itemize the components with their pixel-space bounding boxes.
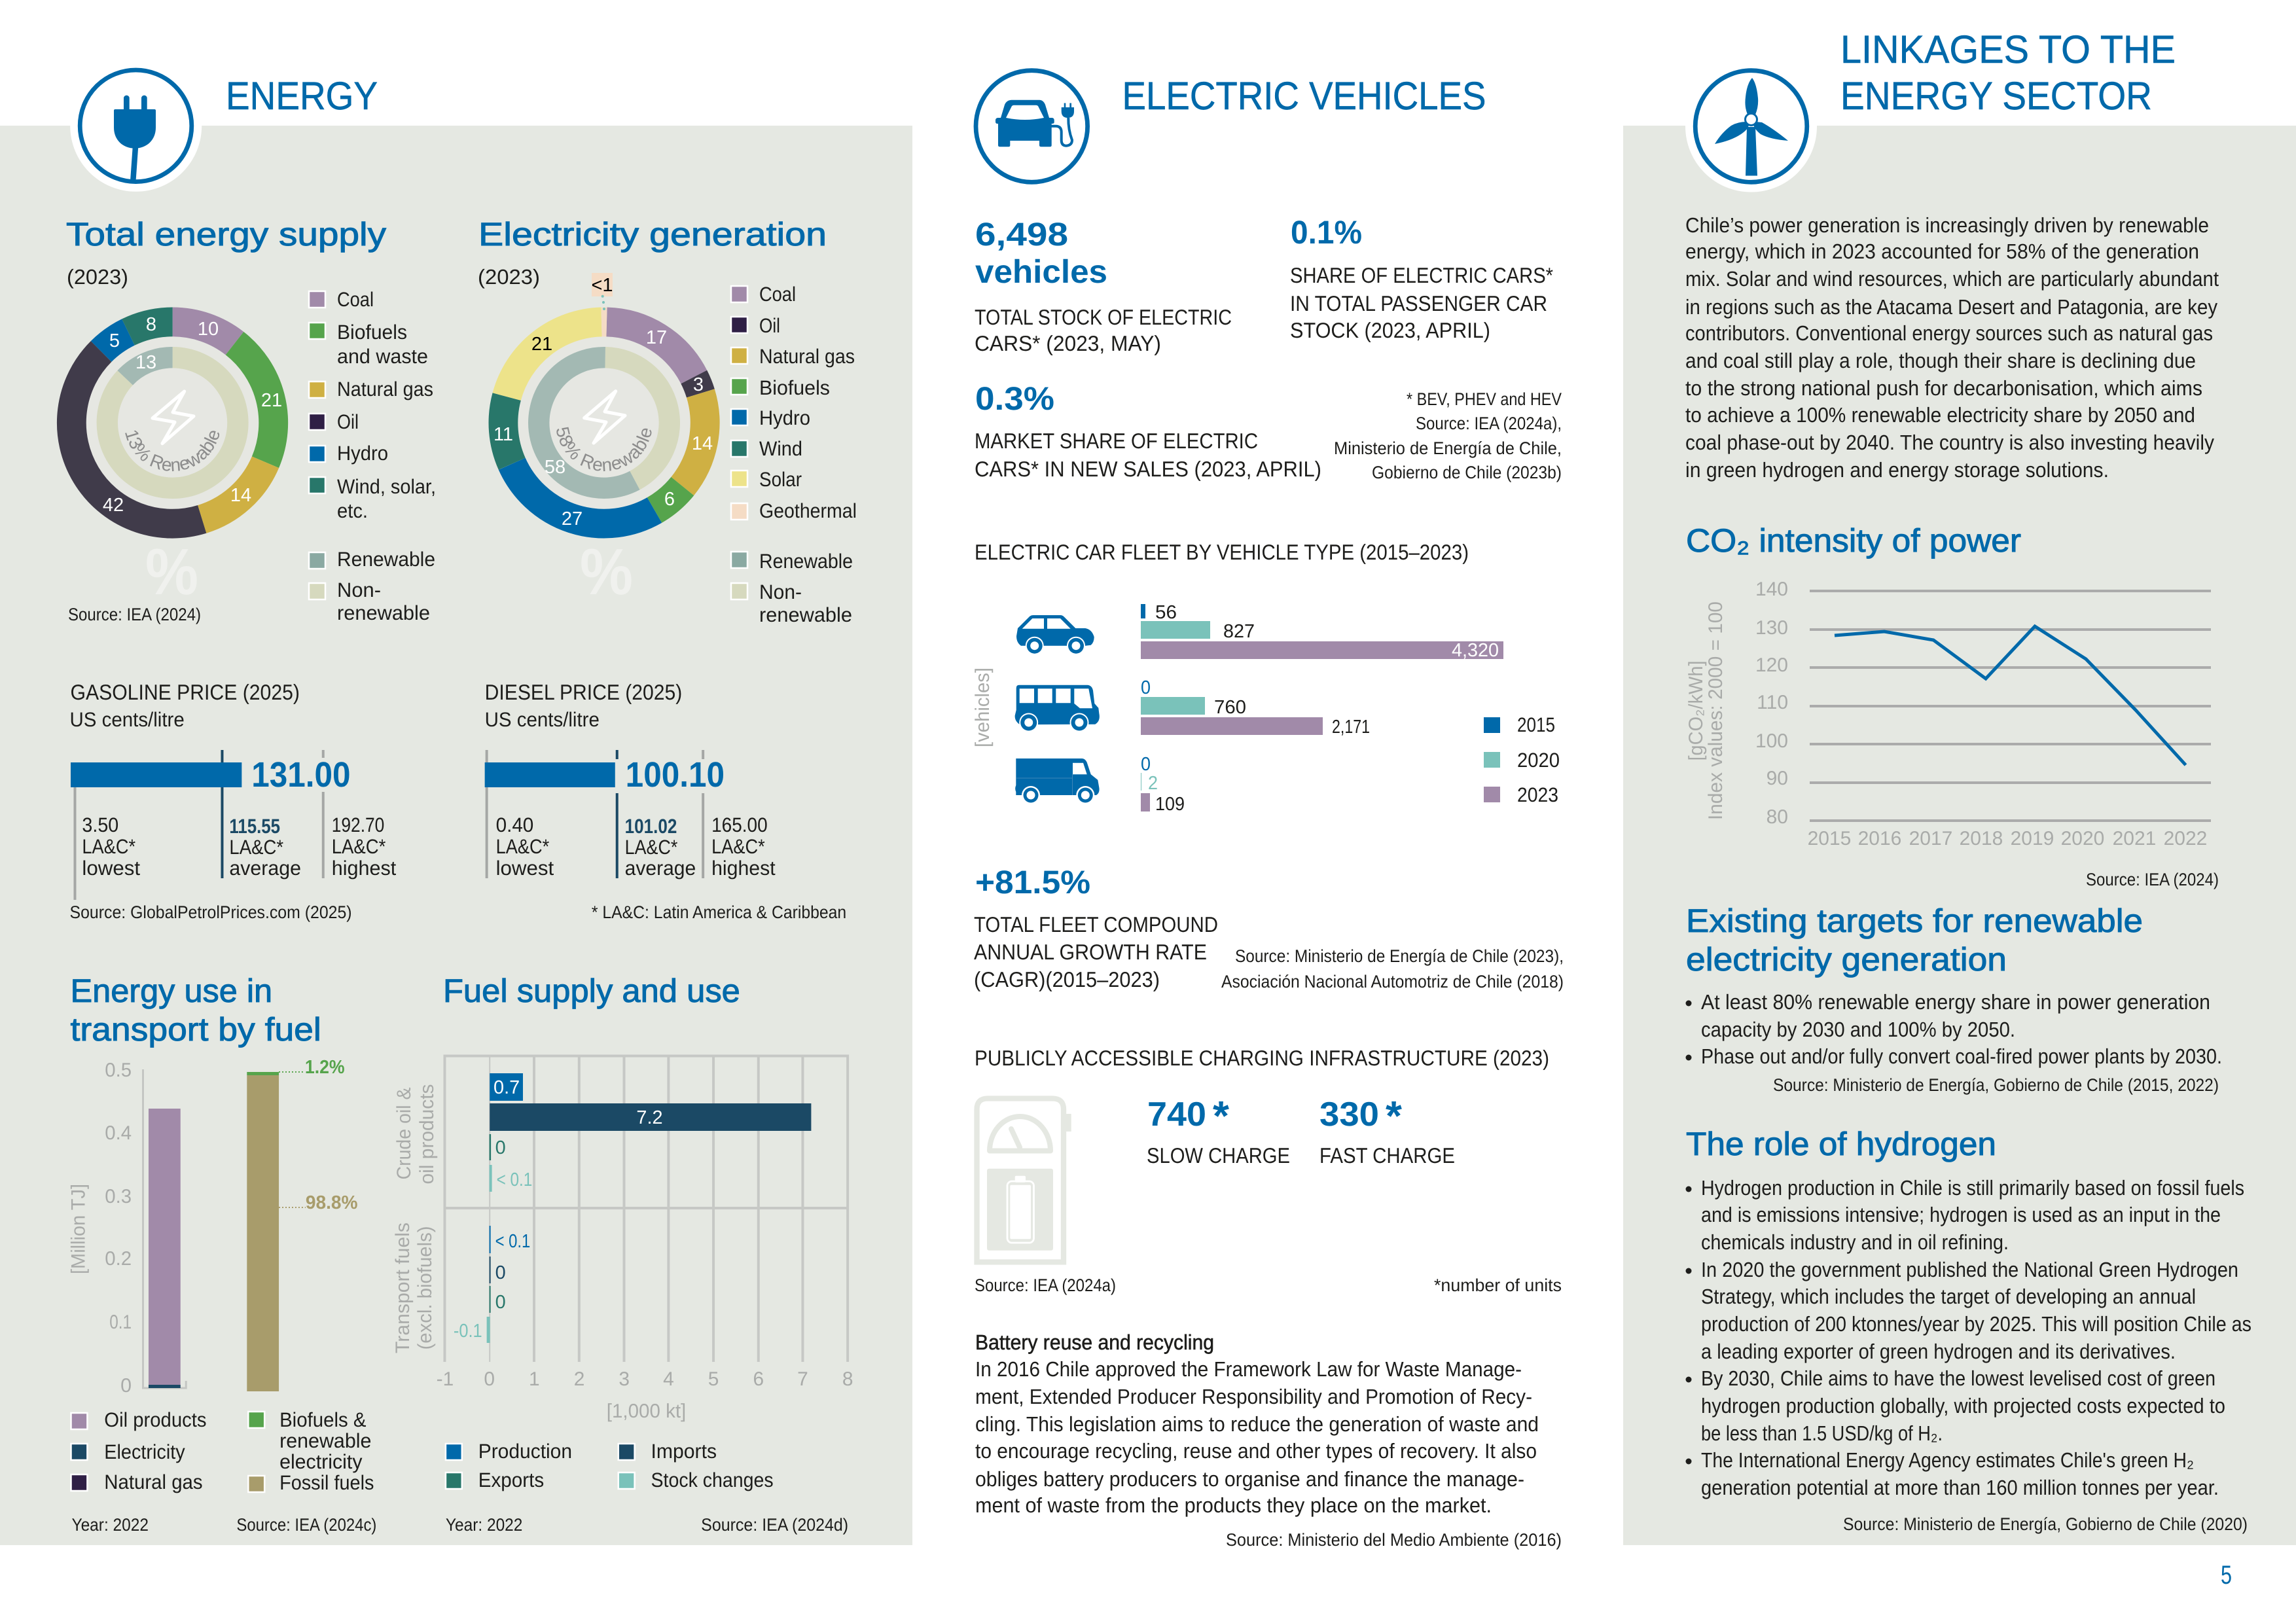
source note: EV statistics: Gobierno de Chile (2023b) — [1372, 463, 1562, 482]
stat: slow charge: SLOW CHARGE — [1147, 1143, 1290, 1168]
gasoline price block: lowest — [82, 857, 140, 880]
lower energy content: prices and charts — [68, 680, 853, 1535]
line chart: CO2 intensity: 2015 — [1808, 828, 1851, 849]
heading: charging infrastructure: PUBLICLY ACCESSIBLE CHARGING INFRASTRUCTURE (2023) — [975, 1046, 1549, 1070]
heading: existing targets — [1686, 902, 2143, 978]
icon: bus — [1015, 685, 1100, 732]
text block: intro: in regions such as the Atacama Desert and Patagonia, are key — [1685, 295, 2217, 319]
icon: wind turbine — [1685, 60, 1817, 192]
bar: gasoline price — [71, 762, 242, 787]
stat: market share in new sales: CARS* IN NEW SALES (2023, APRIL) — [975, 457, 1321, 481]
diesel price block: average — [625, 857, 696, 880]
bar chart: energy use in transport: 0.2 — [105, 1248, 132, 1270]
bar chart: fuel supply and use: Transport fuels — [392, 1222, 414, 1353]
page number: 5 — [2221, 1561, 2232, 1590]
bar chart: fuel supply and use: 5 — [708, 1368, 719, 1390]
legend: fuel supply and use: Production — [478, 1440, 572, 1463]
year label: electricity generation: (2023) — [478, 265, 540, 289]
bullet list: role of hydrogen: Strategy, which includes the target of developing an annual — [1701, 1285, 2196, 1308]
bar: transport exports 0: 0 — [495, 1292, 506, 1313]
percent watermark: electricity generation: % — [580, 535, 633, 609]
heading: linkages to the energy sector: ENERGY SECTOR — [1840, 74, 2152, 118]
donut chart: electricity generation: 58% Renewable — [556, 427, 652, 471]
bullet list: role of hydrogen: By 2030, Chile aims to have the lowest levelised cost of green — [1701, 1366, 2215, 1390]
bar chart: fuel supply and use: oil products — [416, 1084, 438, 1185]
bar: production 0.7 — [490, 1073, 523, 1101]
bar chart: bus fleet — [1141, 677, 1370, 738]
heading: energy use in transport by fuel: transport by fuel — [71, 1011, 321, 1048]
legend: electricity generation: Hydro — [759, 406, 810, 429]
bar chart: fuel supply and use: 6 — [753, 1368, 764, 1390]
bar: transport production — [490, 1226, 530, 1253]
line chart: CO2 intensity: 2017 — [1909, 828, 1952, 849]
bullet list: role of hydrogen: and is emissions intensive; hydrogen is used as an input in the — [1701, 1203, 2221, 1226]
donut chart: total energy supply: 14 — [230, 485, 251, 506]
line chart: CO2 intensity: 2018 — [1960, 828, 2003, 849]
diesel price block: 101.02 — [625, 815, 677, 838]
heading: existing targets: Existing targets for renewable — [1686, 902, 2143, 939]
bullet list: role of hydrogen: The International Energy Agency estimates Chile's green H₂ — [1701, 1448, 2194, 1472]
icon: lightning bolt — [152, 391, 194, 444]
bar chart: bus fleet: 760 — [1214, 697, 1246, 718]
footnote: number of units: *number of units — [1434, 1275, 1562, 1295]
stat: total stock of electric cars — [975, 216, 1232, 355]
legend: total energy supply: Wind, solar, — [337, 475, 436, 498]
bar chart: fuel supply and use: 7 — [797, 1368, 808, 1390]
text block: battery reuse and recycling: ment, Extended Producer Responsibility and Promotion of Recy- — [975, 1385, 1532, 1408]
text block: intro: in green hydrogen and energy storage solutions. — [1685, 458, 2109, 482]
bar chart: van fleet: 109 — [1155, 794, 1185, 815]
text block: intro: to achieve a 100% renewable electricity share by 2050 and — [1685, 403, 2195, 427]
bullet list: role of hydrogen: be less than 1.5 USD/kg of H₂. — [1701, 1421, 1943, 1445]
callout: 1.2%: 1.2% — [305, 1057, 345, 1078]
heading: energy use in transport by fuel: Energy use in — [71, 972, 272, 1009]
line chart: CO2 intensity: 110 — [1757, 692, 1788, 713]
gasoline price block: average — [229, 857, 301, 880]
heading: ELECTRIC VEHICLES: ELECTRIC VEHICLES — [1122, 74, 1486, 118]
bar chart: fuel supply and use: 1 — [529, 1368, 540, 1390]
source: role of hydrogen: Source: Ministerio de Energía, Gobierno de Chile (2020) — [1843, 1514, 2248, 1534]
source: fleet growth — [1221, 946, 1564, 991]
line chart: CO2 intensity: [gCO₂/kWh] — [1685, 661, 1707, 760]
legend: total energy supply: Oil — [337, 410, 359, 433]
legend: energy use in transport: renewable — [279, 1429, 371, 1452]
gasoline price block: LA&C* — [229, 836, 283, 859]
legend: electricity generation: renewable — [759, 603, 852, 626]
data line: CO2 intensity — [1835, 626, 2186, 765]
line chart: CO2 intensity: 130 — [1755, 617, 1788, 639]
stat: slow charge: * — [1213, 1092, 1229, 1139]
source note: EV statistics — [1334, 389, 1562, 482]
source: CO2 intensity: Source: IEA (2024) — [2086, 870, 2219, 889]
bullet list: role of hydrogen: generation potential at more than 160 million tonnes per year. — [1701, 1476, 2219, 1499]
stat: total stock of electric cars: vehicles — [975, 253, 1107, 290]
legend: total energy supply: and waste — [337, 345, 428, 368]
axis label: vehicles: [vehicles] — [972, 668, 994, 747]
gasoline price block: LA&C* — [332, 835, 386, 858]
source: fleet growth: Source: Ministerio de Energía de Chile (2023), — [1235, 946, 1564, 966]
stat: fleet compound annual growth: (CAGR)(2015–2023) — [974, 967, 1160, 991]
source: fuel supply chart: Source: IEA (2024d) — [701, 1515, 848, 1535]
line chart: CO2 intensity: 80 — [1767, 806, 1788, 828]
legend: energy use in transport: Electricity — [104, 1440, 185, 1463]
line chart: CO2 intensity: 100 — [1755, 730, 1788, 752]
panel background: energy — [0, 126, 912, 1545]
bar chart: van fleet — [1141, 754, 1185, 815]
bullet list: role of hydrogen: a leading exporter of green hydrogen and its derivatives. — [1701, 1340, 2176, 1363]
gasoline price block: 3.50 — [82, 813, 118, 836]
source note: EV statistics: * BEV, PHEV and HEV — [1407, 389, 1562, 409]
bar: transport stock changes: -0.1 — [454, 1321, 482, 1342]
icon: lightning bolt — [584, 391, 625, 443]
donut chart: total energy supply: 21 — [261, 390, 282, 411]
legend: electricity generation: Oil — [759, 314, 780, 337]
bar: crude stock changes: < 0.1 — [497, 1169, 532, 1190]
legend: total energy supply: Biofuels — [337, 321, 407, 344]
legend: total energy supply: Natural gas — [337, 378, 433, 401]
gasoline price block: 115.55 — [229, 815, 280, 838]
callout: 1.2% — [279, 1057, 345, 1078]
stat: total stock of electric cars: CARS* (2023, MAY) — [975, 331, 1161, 355]
text block: intro: to the strong national push for decarbonisation, which aims — [1685, 376, 2202, 400]
gasoline price block: LA&C* — [82, 835, 135, 858]
line chart: CO2 intensity: 90 — [1767, 768, 1788, 789]
donut chart: electricity generation — [488, 273, 720, 538]
bar: energy use by product — [149, 1109, 181, 1388]
legend: total energy supply: Coal — [337, 288, 374, 311]
bar chart: car fleet — [1141, 602, 1503, 661]
legend: fuel supply and use: Exports — [478, 1469, 544, 1491]
legend: fuel supply and use: Imports — [651, 1440, 717, 1463]
heading: the role of hydrogen: The role of hydrogen — [1686, 1126, 1996, 1162]
icon: charging station — [977, 1098, 1071, 1262]
donut chart: electricity generation: 3 — [693, 374, 704, 395]
bar: energy use by renewable and fossil share — [247, 1072, 279, 1391]
text block: intro: energy, which in 2023 accounted for 58% of the generation — [1685, 240, 2199, 263]
stat: fleet compound annual growth: TOTAL FLEET COMPOUND — [974, 912, 1218, 936]
legend: total energy supply: Renewable — [337, 548, 435, 571]
stat: share in passenger car stock: IN TOTAL PASSENGER CAR — [1290, 291, 1547, 315]
line chart: CO2 intensity: 2016 — [1858, 828, 1901, 849]
panel: linkages to the energy sector column — [1623, 27, 2296, 1545]
source: battery recycling: Source: Ministerio del Medio Ambiente (2016) — [1226, 1530, 1562, 1550]
value: gasoline price: 131.00 — [251, 755, 351, 794]
donut chart: total energy supply: 42 — [103, 495, 124, 516]
bar chart: fuel supply and use: 0 — [484, 1368, 495, 1390]
bar chart: fuel supply and use: -1 — [437, 1368, 454, 1390]
year note: fuel supply chart: Year: 2022 — [446, 1515, 522, 1535]
legend: electricity generation: Coal — [759, 283, 796, 306]
legend: fleet years: 2023 — [1517, 783, 1558, 806]
heading: electric car fleet: ELECTRIC CAR FLEET BY VEHICLE TYPE (2015–2023) — [975, 540, 1469, 564]
source note: EV statistics: Source: IEA (2024a), — [1416, 414, 1562, 433]
legend: energy use in transport: Biofuels & — [279, 1408, 367, 1431]
diesel price block: lowest — [496, 857, 554, 880]
bar chart: fuel supply and use: 8 — [842, 1368, 853, 1390]
bullet list: role of hydrogen: production of 200 ktonnes/year by 2025. This will position Chile as — [1701, 1312, 2251, 1336]
bar chart: fuel supply and use: (excl. biofuels) — [414, 1226, 436, 1349]
footnote: LA&C: * LA&C: Latin America & Caribbean — [592, 902, 846, 922]
legend: total energy supply: etc. — [337, 499, 368, 522]
bar chart: fuel supply and use — [392, 1056, 853, 1422]
bar chart: fuel supply and use: 3 — [619, 1368, 630, 1390]
donut chart: total energy supply: 8 — [146, 314, 156, 335]
text block: battery reuse and recycling: ment of waste from the products they place on the market. — [975, 1493, 1492, 1517]
bar chart: energy use in transport: 0.5 — [105, 1060, 132, 1081]
bar chart: energy use in transport: [Million TJ] — [68, 1184, 89, 1274]
callout: 98.8%: 98.8% — [306, 1192, 358, 1213]
bullet list: existing targets: capacity by 2030 and 100% by 2050. — [1701, 1018, 2015, 1041]
stat: share in passenger car stock: SHARE OF ELECTRIC CARS* — [1290, 263, 1553, 287]
bar chart: energy use in transport: 0 — [120, 1375, 132, 1397]
source: charging: Source: IEA (2024a) — [975, 1275, 1116, 1295]
bar chart: energy use in transport: 0.4 — [105, 1122, 132, 1144]
diesel price block: 0.40 — [496, 813, 533, 836]
heading: existing targets: electricity generation — [1686, 941, 2007, 978]
line chart: CO2 intensity: Index values: 2000 = 100 — [1705, 601, 1727, 820]
stat: market share in new sales: MARKET SHARE OF ELECTRIC — [975, 429, 1258, 453]
stat: total stock of electric cars: 6,498 — [975, 216, 1068, 253]
icon: van — [1015, 758, 1100, 804]
text block: intro — [1685, 213, 2219, 482]
donut chart: electricity generation: 27 — [562, 508, 583, 529]
bar chart: fuel supply and use: 2 — [574, 1368, 584, 1390]
bar chart: bus fleet: 0 — [1141, 677, 1151, 698]
text block: intro: Chile’s power generation is increasingly driven by renewable — [1685, 213, 2209, 237]
legend: fuel supply and use: Stock changes — [651, 1469, 774, 1491]
legend: fuel supply and use — [446, 1440, 774, 1491]
legend: electricity generation: Renewable — [759, 550, 853, 573]
diesel price block: 165.00 — [711, 813, 768, 836]
bar: transport production: < 0.1 — [495, 1231, 530, 1252]
bar chart: fuel supply and use: 4 — [663, 1368, 674, 1390]
diesel price block: DIESEL PRICE (2025) — [485, 680, 682, 704]
bar: transport imports 0 — [490, 1257, 506, 1283]
source: fleet growth: Asociación Nacional Automotriz de Chile (2018) — [1221, 972, 1564, 991]
bar chart: van fleet: 0 — [1141, 754, 1151, 775]
heading: electricity generation: Electricity generation — [478, 216, 827, 253]
year note: transport chart: Year: 2022 — [72, 1515, 149, 1535]
donut chart: electricity generation: 21 — [531, 334, 552, 355]
legend: energy use in transport: Oil products — [104, 1408, 207, 1431]
line chart: CO2 intensity: 120 — [1755, 654, 1788, 676]
gasoline price block: 192.70 — [332, 813, 384, 836]
stat: share in passenger car stock — [1290, 214, 1553, 342]
source note: EV statistics: Ministerio de Energía de Chile, — [1334, 438, 1562, 458]
heading: ENERGY: ENERGY — [226, 74, 378, 118]
source: transport chart: Source: IEA (2024c) — [236, 1515, 376, 1535]
diesel price block — [485, 680, 776, 880]
source: total energy supply: Source: IEA (2024) — [68, 605, 201, 624]
stat: fast charge: 330 — [1319, 1096, 1379, 1133]
heading: total energy supply: Total energy supply — [66, 216, 386, 253]
text block: battery reuse and recycling: obliges battery producers to organise and finance the manage- — [975, 1467, 1524, 1491]
legend: energy use in transport: Fossil fuels — [279, 1471, 374, 1494]
bullet list: role of hydrogen — [1686, 1176, 2251, 1499]
legend: fleet years: 2020 — [1517, 749, 1560, 772]
legend: electricity generation: Natural gas — [759, 345, 855, 368]
diesel price block: LA&C* — [711, 835, 765, 858]
bullet list: existing targets: Phase out and/or fully convert coal-fired power plants by 2030. — [1701, 1044, 2222, 1068]
stat: market share in new sales — [975, 380, 1321, 481]
gasoline price block: GASOLINE PRICE (2025) — [71, 680, 300, 704]
heading: energy use in transport by fuel — [71, 972, 321, 1048]
stat: fleet compound annual growth — [974, 864, 1218, 991]
legend: total energy supply: Non- — [337, 579, 381, 601]
bar chart: fuel supply and use: [1,000 kt] — [607, 1400, 686, 1422]
legend: energy use in transport: Natural gas — [104, 1471, 203, 1493]
bar: crude stock changes — [490, 1165, 532, 1192]
bullet list: existing targets: At least 80% renewable energy share in power generation — [1701, 990, 2210, 1014]
diesel price block: LA&C* — [496, 835, 549, 858]
year label: total energy supply: (2023) — [67, 265, 128, 289]
stat: market share in new sales: 0.3% — [975, 380, 1054, 417]
line chart: CO2 intensity: 2020 — [2061, 828, 2104, 849]
value: diesel price: 100.10 — [626, 755, 725, 794]
text block: battery reuse and recycling — [975, 1330, 1539, 1517]
bar chart: car fleet: 56 — [1155, 602, 1177, 623]
donut chart: electricity generation: 14 — [692, 433, 713, 454]
donut chart: total energy supply: 13 — [135, 352, 156, 373]
donut chart: electricity generation: 58 — [545, 457, 565, 478]
legend: total energy supply — [309, 288, 436, 624]
text block: battery reuse and recycling: cling. This legislation aims to reduce the generation of waste and — [975, 1412, 1539, 1436]
bar: transport imports 0: 0 — [495, 1262, 506, 1283]
percent watermark: total energy supply: % — [145, 535, 198, 609]
diesel price block: LA&C* — [625, 836, 677, 859]
donut chart: total energy supply: 10 — [198, 319, 219, 340]
stat: fleet compound annual growth: ANNUAL GROWTH RATE — [974, 940, 1207, 964]
stat: total stock of electric cars: TOTAL STOCK OF ELECTRIC — [975, 305, 1232, 329]
legend: fleet years: 2015 — [1517, 713, 1555, 736]
bar chart: car fleet: 827 — [1223, 621, 1255, 642]
legend: electricity generation: Biofuels — [759, 376, 830, 399]
text block: battery reuse and recycling: Battery reuse and recycling — [975, 1330, 1214, 1354]
bar chart: car fleet: 4,320 — [1452, 640, 1499, 661]
donut chart: electricity generation: 17 — [646, 327, 667, 348]
panel: electric vehicles column — [972, 71, 1564, 1550]
line chart: CO2 intensity: 2021 — [2113, 828, 2156, 849]
text block: battery reuse and recycling: to encourage recycling, reuse and other types of recovery. It also — [975, 1439, 1537, 1463]
donut chart: total energy supply — [56, 308, 288, 539]
bullet list: role of hydrogen: Hydrogen production in Chile is still primarily based on fossil fuels — [1701, 1176, 2244, 1200]
donut chart: electricity generation: 11 — [493, 424, 513, 445]
bar chart: bus fleet: 2,171 — [1332, 717, 1370, 738]
stat: share in passenger car stock: 0.1% — [1291, 214, 1362, 251]
source: existing targets: Source: Ministerio de Energía, Gobierno de Chile (2015, 2022) — [1773, 1075, 2219, 1095]
legend: energy use in transport — [71, 1408, 374, 1494]
callout: geothermal share: <1 — [591, 275, 613, 296]
legend: fleet years — [1484, 713, 1560, 806]
bar: diesel price — [485, 762, 615, 787]
stat: fleet compound annual growth: +81.5% — [975, 864, 1090, 901]
legend: electricity generation: Non- — [759, 580, 802, 603]
diesel price block: highest — [711, 857, 776, 880]
gasoline price block: US cents/litre — [70, 708, 185, 731]
stat: share in passenger car stock: STOCK (2023, APRIL) — [1290, 318, 1490, 342]
stat: slow charge — [1147, 1092, 1290, 1168]
text block: intro: contributors. Conventional energy sources such as natural gas — [1685, 321, 2213, 345]
stat: fast charge: FAST CHARGE — [1319, 1143, 1455, 1168]
icon: car — [1016, 615, 1094, 655]
diesel price block: US cents/litre — [485, 708, 600, 731]
bar chart: energy use in transport — [68, 1057, 358, 1397]
gasoline price block: highest — [332, 857, 397, 880]
bar: crude exports 0 — [490, 1134, 506, 1160]
text block: battery reuse and recycling: In 2016 Chile approved the Framework Law for Waste Manage- — [975, 1357, 1522, 1381]
panel: energy column — [0, 68, 912, 1545]
bar chart: energy use in transport: 0.1 — [109, 1311, 132, 1333]
bullet list: existing targets — [1686, 990, 2222, 1068]
line chart: CO2 intensity: 140 — [1755, 579, 1788, 600]
legend: electricity generation: Geothermal — [759, 499, 857, 522]
legend: electricity generation — [731, 283, 857, 626]
callout: 98.8% — [279, 1192, 358, 1213]
stat: fast charge — [1319, 1092, 1455, 1168]
bullet list: role of hydrogen: chemicals industry and in oil refining. — [1701, 1230, 2009, 1254]
bar: production 0.7: 0.7 — [493, 1077, 520, 1098]
bar chart: fuel supply and use: Crude oil & — [393, 1088, 415, 1179]
text block: intro: and coal still play a role, though their share is declining due — [1685, 349, 2196, 372]
bullet list: role of hydrogen: hydrogen production globally, with projected costs expected to — [1701, 1394, 2225, 1418]
line chart: CO2 intensity: 2022 — [2164, 828, 2207, 849]
bullet list: role of hydrogen: In 2020 the government published the National Green Hydrogen — [1701, 1258, 2238, 1281]
icon: electric car — [976, 71, 1088, 182]
line chart: CO2 intensity — [1685, 579, 2211, 849]
panel background: linkages — [1623, 126, 2296, 1545]
stat: slow charge: 740 — [1147, 1096, 1206, 1133]
heading: fuel supply and use: Fuel supply and use — [443, 972, 740, 1009]
bar: transport exports 0 — [490, 1286, 506, 1313]
donut chart: total energy supply: 13% Renewable — [125, 431, 220, 471]
gasoline price block — [70, 680, 397, 900]
line chart: CO2 intensity: 2019 — [2011, 828, 2054, 849]
legend: total energy supply: renewable — [337, 601, 430, 624]
icon: plug — [70, 60, 202, 192]
bar: imports 7.2 — [490, 1103, 811, 1131]
bar: imports 7.2: 7.2 — [636, 1107, 663, 1128]
bar chart: energy use in transport: 0.3 — [105, 1186, 132, 1207]
heading: linkages to the energy sector: LINKAGES TO THE — [1840, 27, 2176, 71]
stat: fast charge: * — [1386, 1092, 1402, 1139]
donut chart: electricity generation: 6 — [664, 489, 675, 510]
source: fuel prices: Source: GlobalPetrolPrices.com (2025) — [70, 902, 352, 922]
bar chart: van fleet: 2 — [1148, 773, 1158, 794]
heading: CO2 intensity of power: CO₂ intensity of power — [1686, 522, 2021, 559]
legend: electricity generation: Solar — [759, 468, 802, 491]
text block: intro: mix. Solar and wind resources, which are particularly abundant — [1685, 267, 2219, 291]
heading: linkages to the energy sector — [1840, 27, 2176, 118]
callout: geothermal share — [591, 273, 613, 310]
bar: crude exports 0: 0 — [495, 1137, 506, 1158]
text block: intro: coal phase-out by 2040. The country is also investing heavily — [1685, 431, 2214, 454]
legend: energy use in transport: electricity — [279, 1450, 363, 1473]
legend: electricity generation: Wind — [759, 437, 802, 460]
donut chart: total energy supply: 5 — [109, 330, 120, 351]
legend: total energy supply: Hydro — [337, 442, 388, 465]
